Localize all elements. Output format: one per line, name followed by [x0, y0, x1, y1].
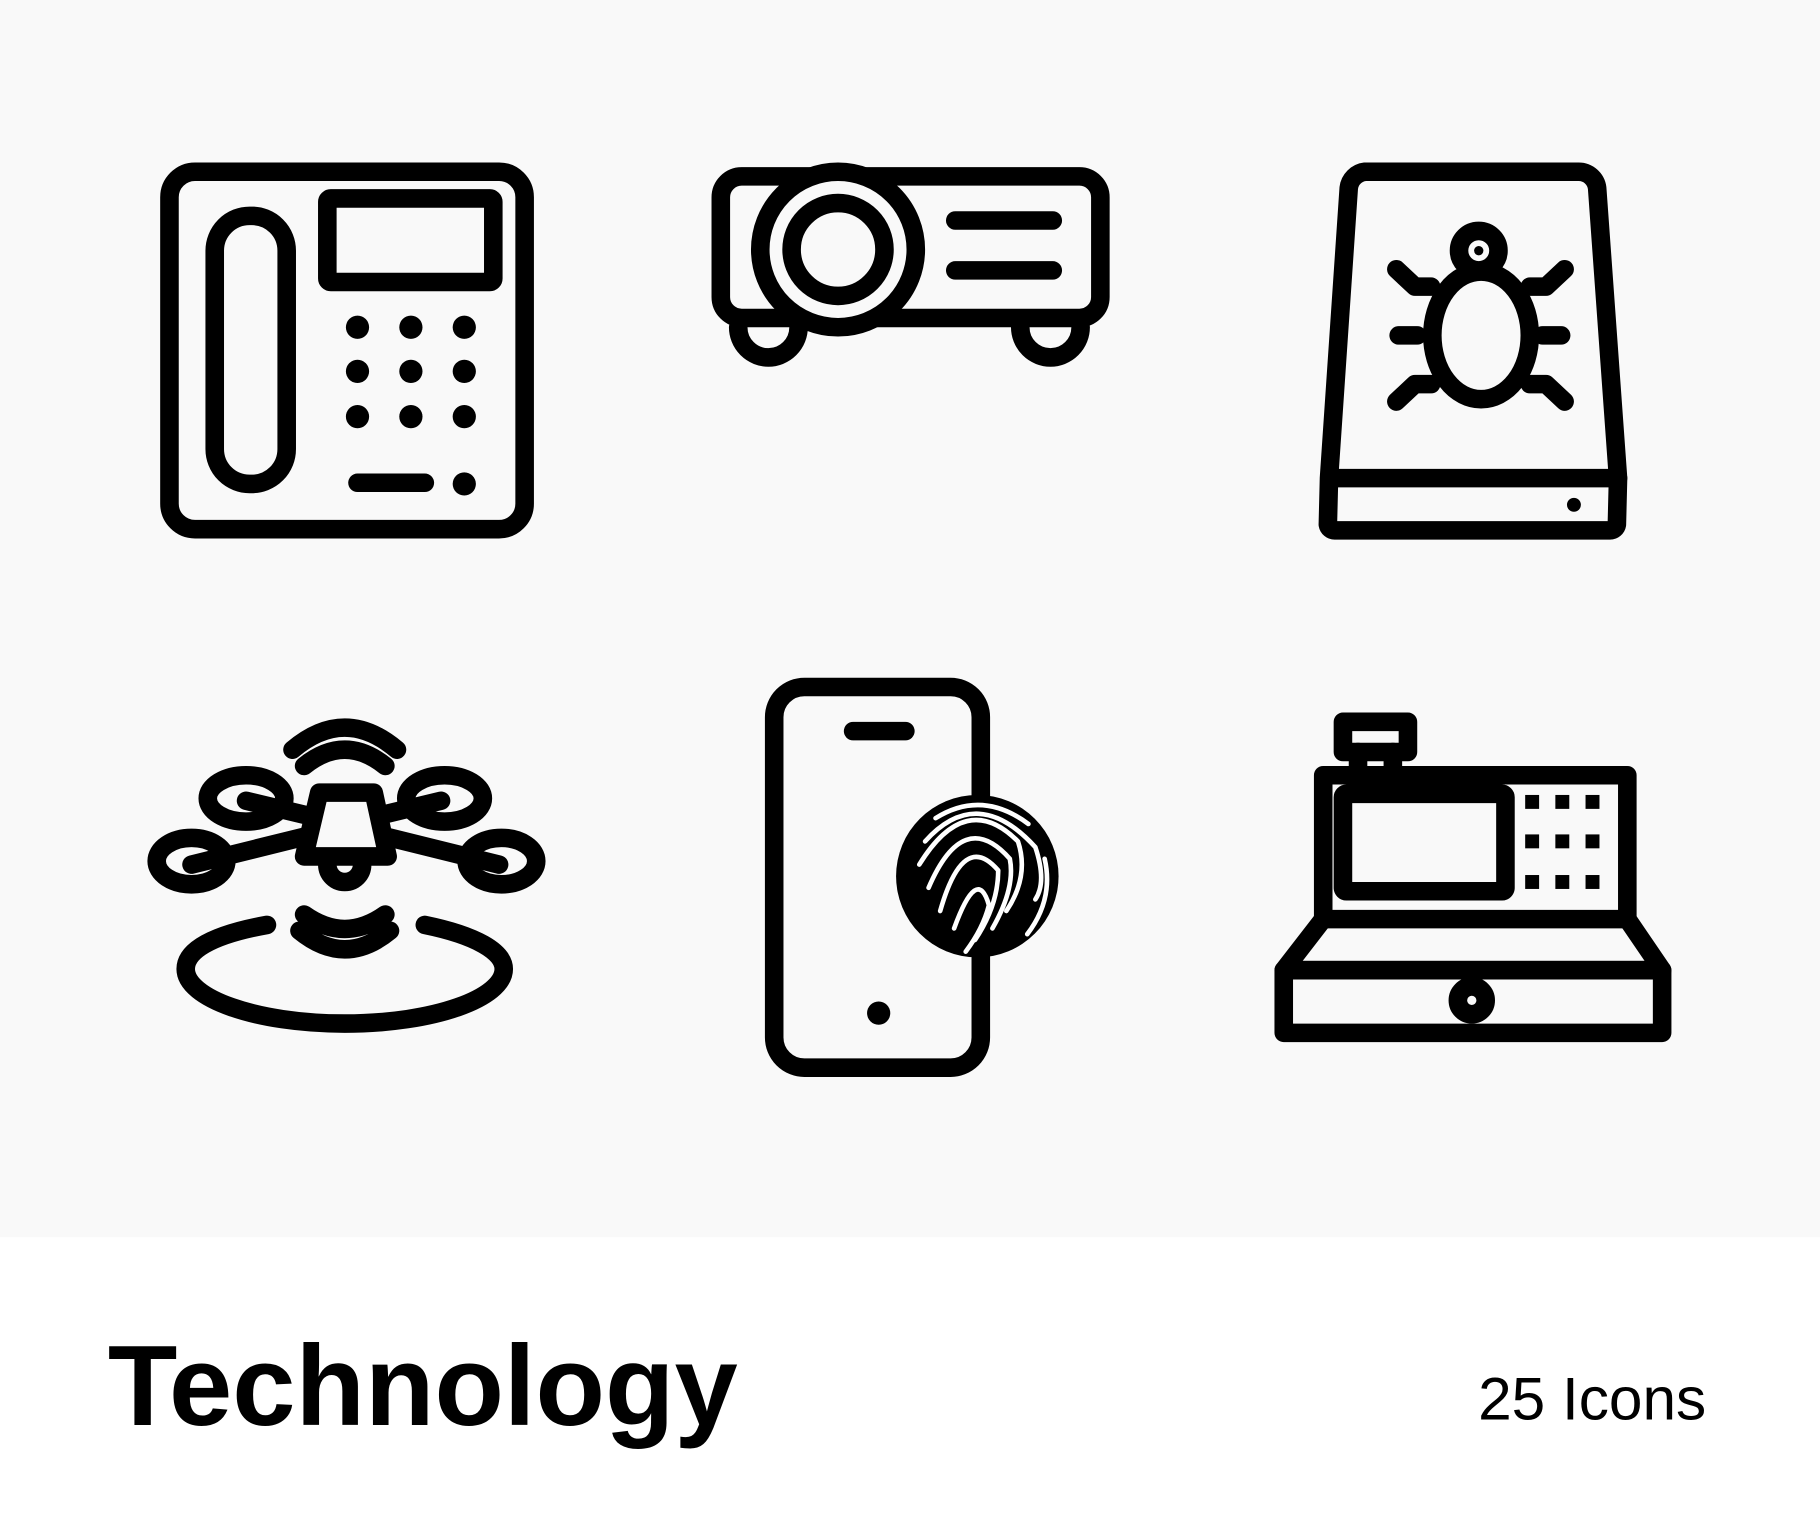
- icon: drone: [157, 728, 536, 1024]
- icon: desk phone: [169, 172, 525, 529]
- icon count: 25 Icons: [1478, 1364, 1706, 1432]
- icon: cash register: [1284, 722, 1662, 1033]
- icon: projector: [721, 172, 1100, 357]
- title: Technology: [108, 1323, 738, 1450]
- icon: phone fingerprint: [774, 687, 1059, 1068]
- icon: bug drive: [1328, 172, 1618, 530]
